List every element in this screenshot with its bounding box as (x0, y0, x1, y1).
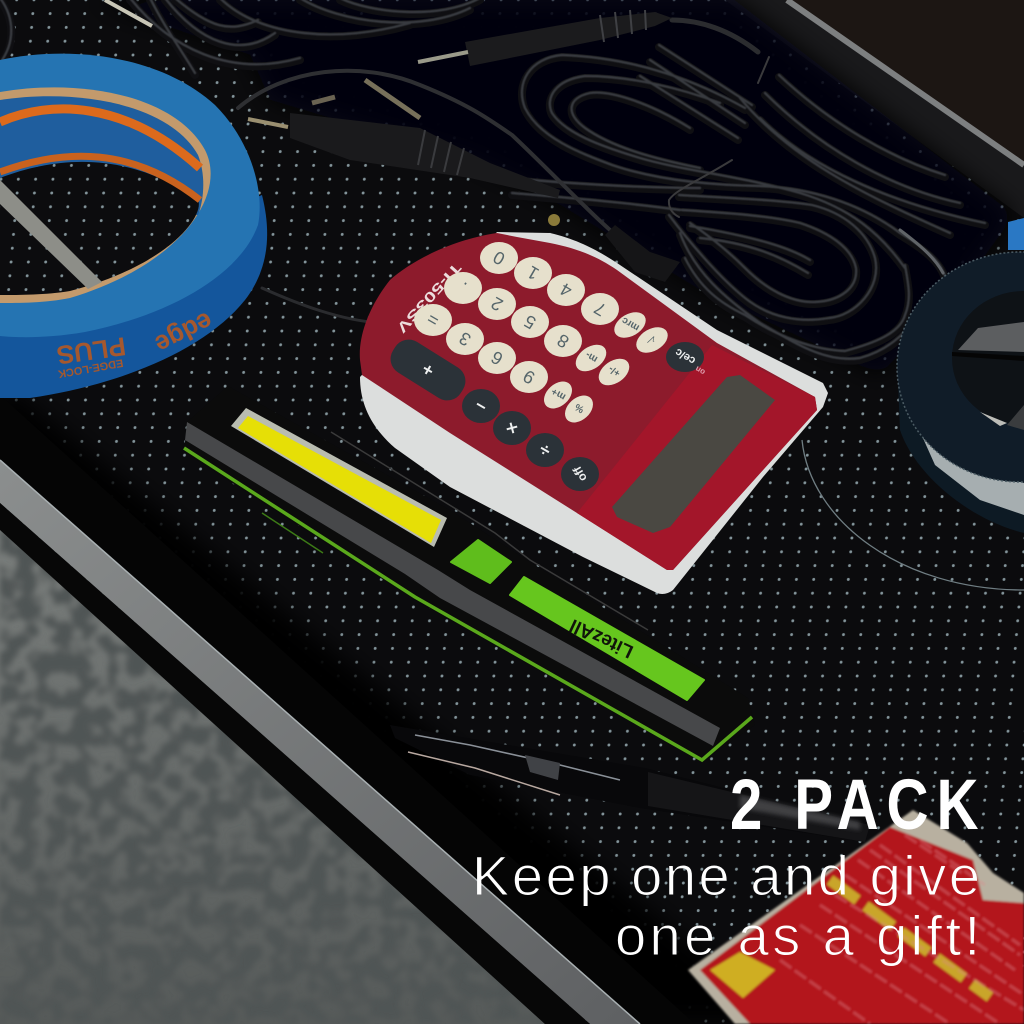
calculator white shell (360, 232, 828, 594)
carpet floor (0, 525, 545, 1024)
key labels: m- (584, 349, 600, 365)
thin cable loop (238, 71, 640, 255)
key labels: 1 (524, 262, 542, 284)
black cables (0, 0, 1015, 375)
subheading: Keep one and give (472, 844, 980, 907)
tape inner wall (0, 96, 203, 215)
spacer rod (0, 180, 102, 289)
brand text: LitezAll (567, 614, 637, 662)
calculator (360, 232, 828, 594)
crease line (331, 432, 648, 630)
dark key labels: on (694, 364, 707, 377)
green power button (451, 540, 511, 583)
red box corner (688, 810, 1024, 1024)
tape core (0, 87, 211, 303)
dark key labels: off (570, 463, 590, 484)
tape side (0, 195, 267, 398)
flashlight green trim (184, 448, 752, 760)
audio plugs (105, 0, 680, 282)
headline: 2 PACK: 2 PACK (730, 764, 986, 844)
calculator screen frame (577, 345, 817, 570)
tape print: edge (150, 306, 218, 360)
orange tape edges (0, 109, 200, 168)
key labels: 8 (554, 330, 572, 352)
tape hole (0, 162, 199, 295)
calculator logo: TI-503SV (393, 260, 465, 337)
calculator red face (360, 233, 817, 570)
tape print: PLUS (55, 331, 128, 371)
dark key labels: ce/c (673, 346, 698, 367)
masking tape roll (0, 54, 267, 398)
tape print (55, 306, 218, 380)
key labels: 4 (557, 279, 575, 301)
wire spool (802, 218, 1024, 590)
subheading: one as a gift! (615, 904, 980, 967)
key labels: 6 (488, 347, 506, 369)
COB light panel (231, 408, 447, 547)
dark key labels (418, 346, 707, 484)
box fine print (780, 835, 1024, 1024)
key labels: % (573, 401, 586, 415)
key labels: . (456, 278, 470, 298)
drawer rail (0, 395, 695, 1024)
dark keys (385, 334, 704, 491)
key labels: √ (646, 332, 658, 346)
calculator screen (612, 375, 775, 533)
key labels: 0 (490, 247, 508, 269)
flashlight grey band (185, 422, 720, 746)
tape print: EDGE-LOCK (57, 356, 124, 380)
key labels: = (423, 309, 443, 331)
key labels: 9 (520, 366, 538, 388)
key labels: m+ (549, 385, 568, 402)
LitezAll flashlight (184, 386, 755, 762)
key labels: mrc (620, 314, 641, 333)
key labels: 7 (591, 298, 609, 320)
drawer corner top right (725, 0, 1024, 218)
dark key labels: − (471, 395, 491, 417)
dark key labels: ÷ (536, 439, 554, 461)
green label strip (510, 577, 704, 700)
cream keys (414, 242, 672, 428)
dark key labels: + (418, 359, 438, 381)
key labels: 3 (456, 328, 474, 350)
flashlight body (184, 386, 755, 762)
tape top face (0, 54, 260, 337)
key labels: +/- (607, 363, 623, 378)
subheading (472, 844, 980, 967)
key labels (423, 247, 658, 415)
key labels: 2 (488, 293, 506, 315)
key labels: 5 (521, 311, 539, 333)
dark key labels: × (502, 417, 522, 439)
pen (390, 725, 870, 842)
